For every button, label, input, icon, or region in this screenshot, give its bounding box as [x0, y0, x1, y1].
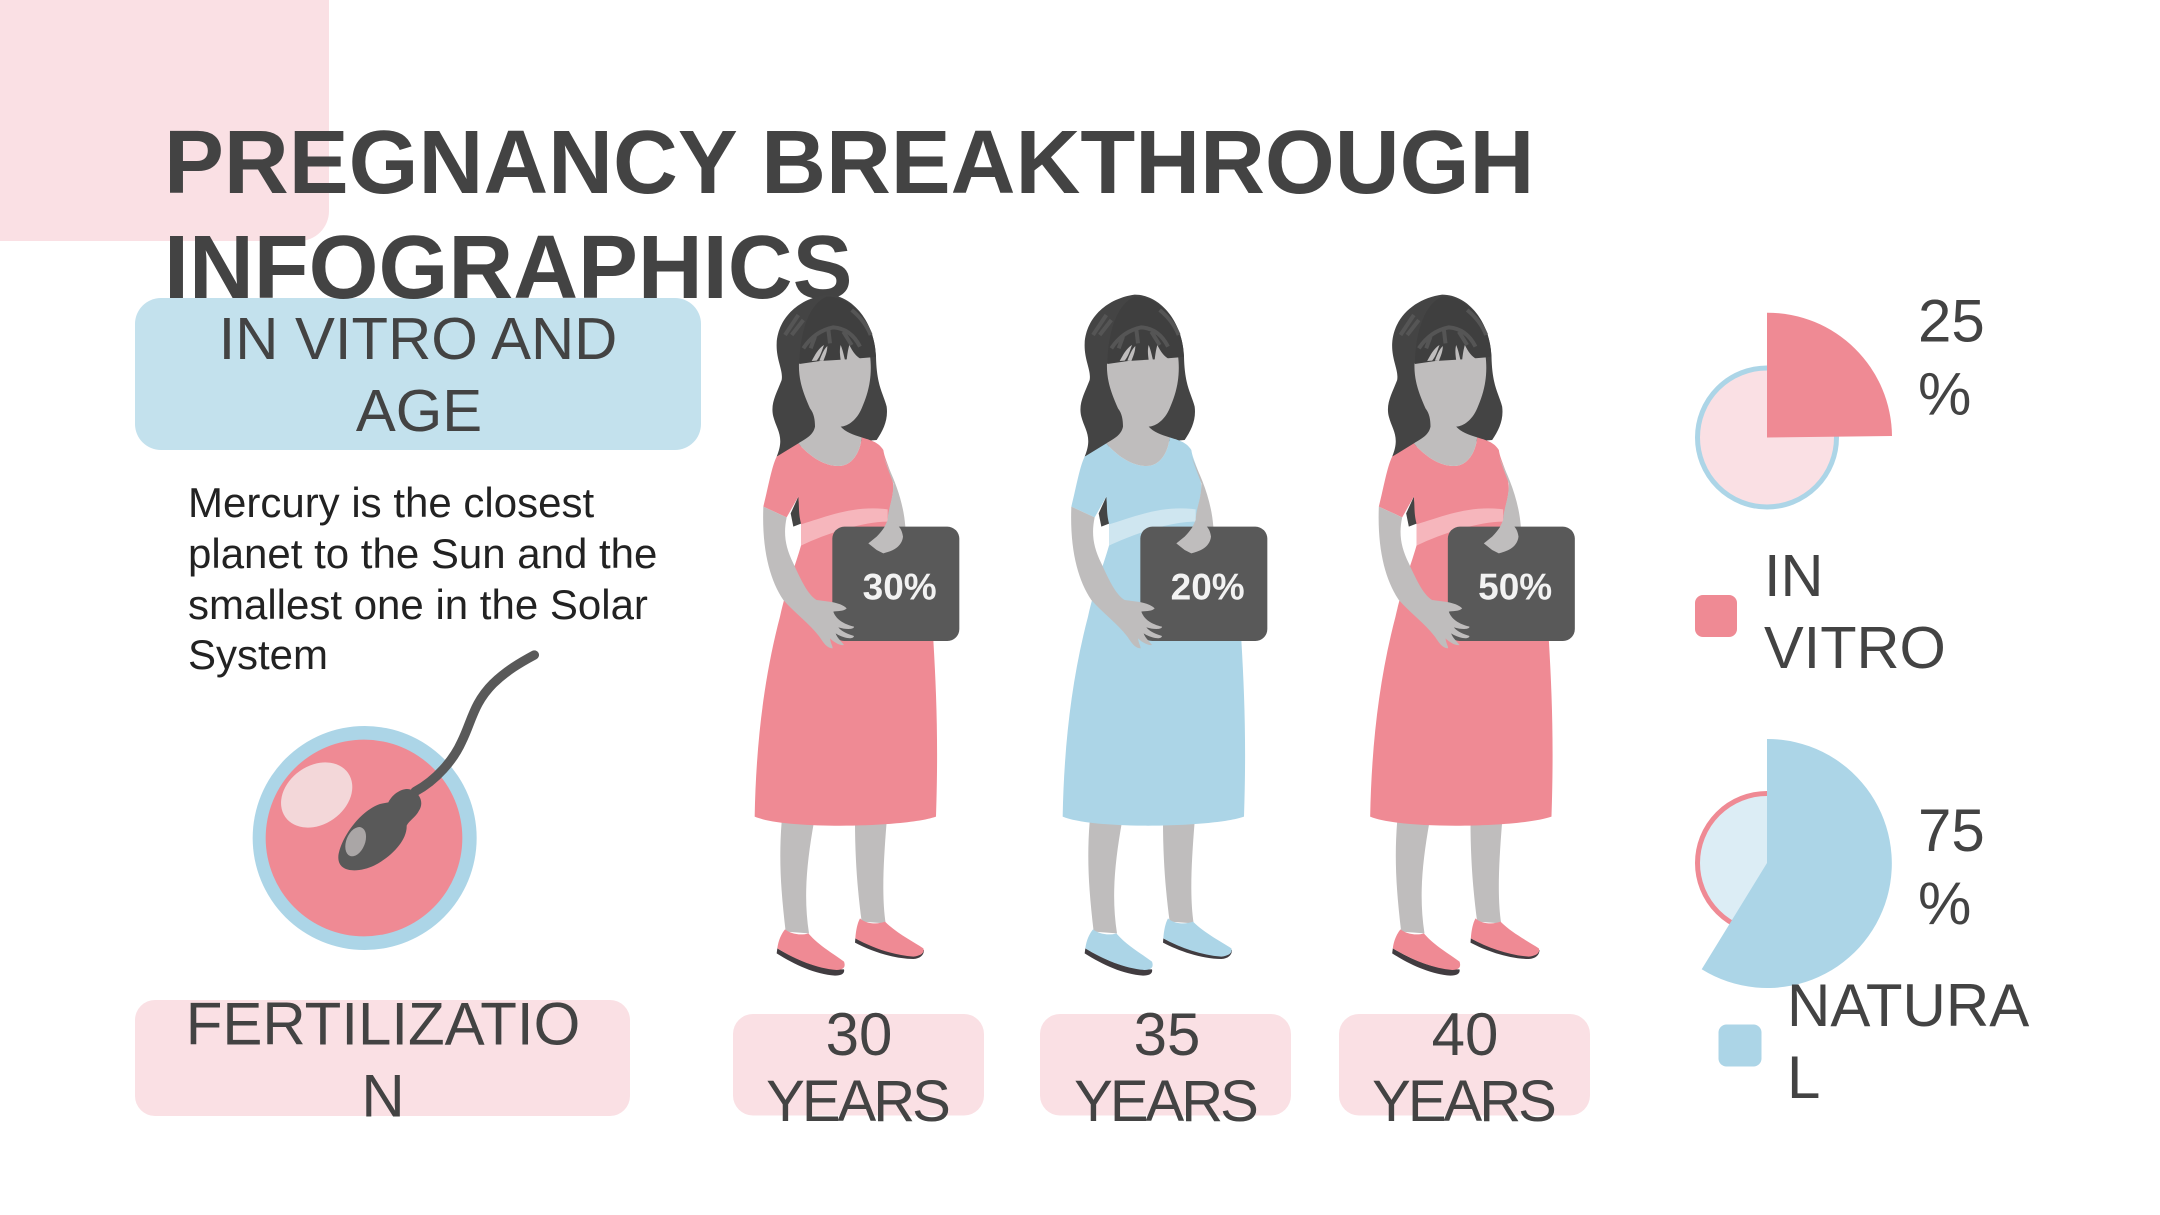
legend swatch: natural	[1718, 1024, 1762, 1066]
chart: natural pie	[1698, 739, 1892, 988]
legs	[1088, 822, 1195, 933]
face and neck	[1414, 355, 1486, 466]
label: 30 years: YEARS	[766, 1069, 949, 1134]
upper hand	[1484, 522, 1518, 553]
label: fertilization: N	[361, 1062, 405, 1130]
figure: woman 30 years	[755, 295, 959, 976]
heading: in vitro and age: AGE	[356, 377, 482, 444]
egg highlight	[268, 749, 365, 841]
upper hand	[868, 522, 903, 553]
shoes	[777, 918, 924, 970]
egg inner	[266, 740, 462, 936]
panel: 40 years pill	[1339, 1014, 1590, 1116]
hair highlights	[785, 310, 871, 348]
value label: 20%	[1171, 566, 1245, 607]
shoe soles	[777, 938, 924, 976]
label: fertilization: FERTILIZATIO	[186, 990, 580, 1058]
value: 25%: %	[1918, 360, 1971, 428]
legs	[780, 822, 887, 933]
fringe gaps	[812, 345, 862, 361]
text block: description: System	[188, 631, 328, 678]
waist band	[1109, 508, 1196, 546]
label: 40 years: YEARS	[1372, 1069, 1555, 1134]
text block: description: planet to the Sun and the	[188, 530, 657, 577]
long hair back	[772, 295, 887, 457]
sign board	[1448, 527, 1575, 641]
dress	[1370, 437, 1553, 826]
long hair back	[1080, 295, 1195, 457]
dress	[755, 437, 937, 826]
pie base circle	[1698, 368, 1836, 507]
waist band	[801, 508, 888, 546]
text block: description: smallest one in the Solar	[188, 581, 648, 628]
shoes	[1085, 918, 1232, 970]
sperm head	[338, 789, 421, 870]
value: 75%: 75	[1918, 797, 1985, 864]
raised arm	[868, 457, 905, 553]
panel: 30 years pill	[733, 1014, 984, 1116]
fringe gaps	[1120, 345, 1170, 361]
egg outer ring	[253, 726, 477, 950]
legend label: in vitro: IN	[1764, 542, 1824, 609]
icon: egg and sperm	[253, 655, 534, 950]
legend label: natural: L	[1787, 1044, 1820, 1111]
label: 40 years: 40	[1432, 1001, 1498, 1068]
sperm tail	[415, 655, 534, 792]
legs	[1396, 822, 1502, 933]
upper hand	[1176, 522, 1211, 553]
waist band	[1416, 508, 1503, 546]
legend label: natural: NATURA	[1787, 972, 2029, 1039]
hair highlights	[1400, 310, 1486, 348]
heading: in vitro and age: IN VITRO AND	[219, 305, 617, 372]
legend swatch: in vitro	[1695, 595, 1737, 637]
lower arm and hand	[1071, 507, 1162, 648]
label: 30 years: 30	[826, 1001, 892, 1068]
sign board	[1140, 527, 1267, 641]
shoe soles	[1085, 938, 1232, 976]
pie base circle	[1698, 794, 1836, 932]
value label: 50%	[1478, 566, 1552, 607]
value: 25%: 25	[1918, 288, 1985, 354]
dress	[1063, 437, 1245, 826]
title: PREGNANCY BREAKTHROUGH	[164, 113, 1534, 213]
fringe gaps	[1427, 345, 1477, 361]
long hair back	[1388, 295, 1502, 457]
face and neck	[1106, 355, 1179, 466]
sperm head highlight	[341, 824, 370, 859]
panel: fertilization pill	[135, 1000, 630, 1116]
text block: description: Mercury is the closest	[188, 479, 594, 526]
figure: woman 35 years	[1063, 295, 1267, 976]
figure: woman 40 years	[1370, 295, 1575, 976]
fringe	[799, 297, 876, 364]
raised arm	[1484, 457, 1521, 553]
raised arm	[1176, 457, 1213, 553]
pie wedge 25%	[1767, 313, 1892, 438]
lower arm and hand	[1379, 507, 1469, 648]
fringe	[1415, 297, 1491, 364]
lower arm and hand	[763, 507, 854, 648]
hair highlights	[1093, 310, 1179, 348]
decorative corner block	[0, 0, 329, 241]
legend label: in vitro: VITRO	[1764, 614, 1946, 681]
sign board	[832, 527, 959, 641]
label: 35 years: 35	[1134, 1001, 1200, 1068]
label: 35 years: YEARS	[1074, 1069, 1257, 1134]
chart: in vitro pie	[1698, 313, 1892, 507]
face and neck	[798, 355, 871, 466]
panel: in vitro heading pill	[135, 298, 701, 450]
pie wedge 75%	[1702, 739, 1892, 988]
value label: 30%	[863, 566, 937, 607]
shoes	[1393, 918, 1539, 970]
panel: 35 years pill	[1040, 1014, 1291, 1116]
fringe	[1107, 297, 1184, 364]
title: INFOGRAPHICS	[164, 218, 852, 318]
shoe soles	[1392, 938, 1539, 976]
value: 75%: %	[1918, 870, 1971, 937]
